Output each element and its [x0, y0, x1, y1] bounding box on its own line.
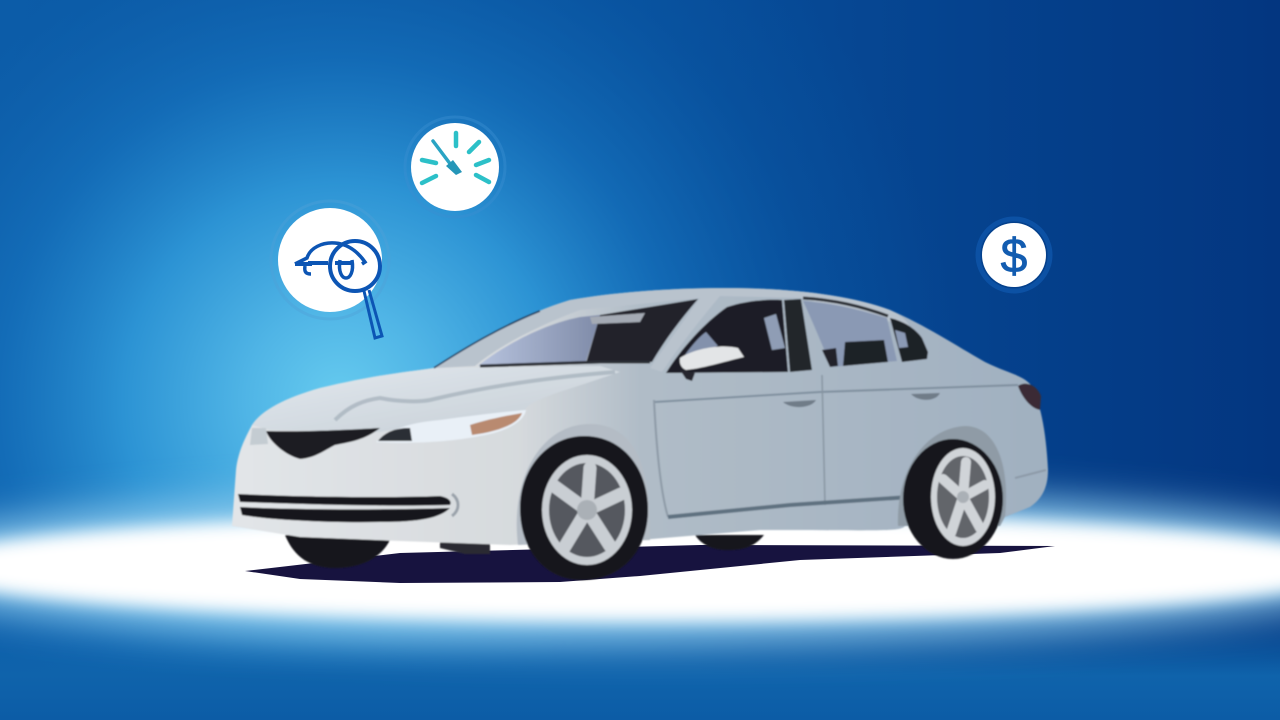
icon: speedometer — [405, 117, 505, 217]
windshield edge — [434, 311, 540, 368]
far side wheels — [285, 535, 764, 568]
tail light — [1018, 384, 1041, 410]
door seam — [822, 375, 825, 505]
icon: dollar coin — [978, 219, 1050, 291]
front grille — [266, 428, 380, 459]
roof and pillar highlight — [436, 288, 910, 372]
icon: dollar coin: $ — [1001, 230, 1027, 283]
windshield — [478, 299, 698, 366]
mirror — [680, 346, 744, 381]
headlight — [376, 410, 526, 443]
left marker light — [250, 428, 268, 445]
car — [232, 288, 1048, 580]
rear window — [803, 298, 897, 367]
character line — [655, 385, 1018, 402]
front wheel — [520, 436, 648, 580]
car shadow — [245, 545, 1055, 583]
hood — [252, 366, 620, 432]
door handles — [783, 393, 940, 407]
front door window — [666, 300, 788, 373]
car body — [232, 288, 1048, 545]
icon: car under magnifying glass — [271, 201, 389, 338]
rear wheel — [903, 439, 1003, 559]
side sill moulding — [668, 497, 910, 517]
rear bumper line — [1015, 470, 1046, 478]
lower bumper vents — [238, 494, 458, 522]
wheel arch front — [517, 424, 650, 545]
wheel arch rear — [898, 426, 1006, 526]
floor spotlight — [0, 490, 1280, 642]
hood crease — [335, 372, 615, 420]
rear quarter window — [890, 318, 928, 362]
door pillar — [784, 299, 812, 372]
